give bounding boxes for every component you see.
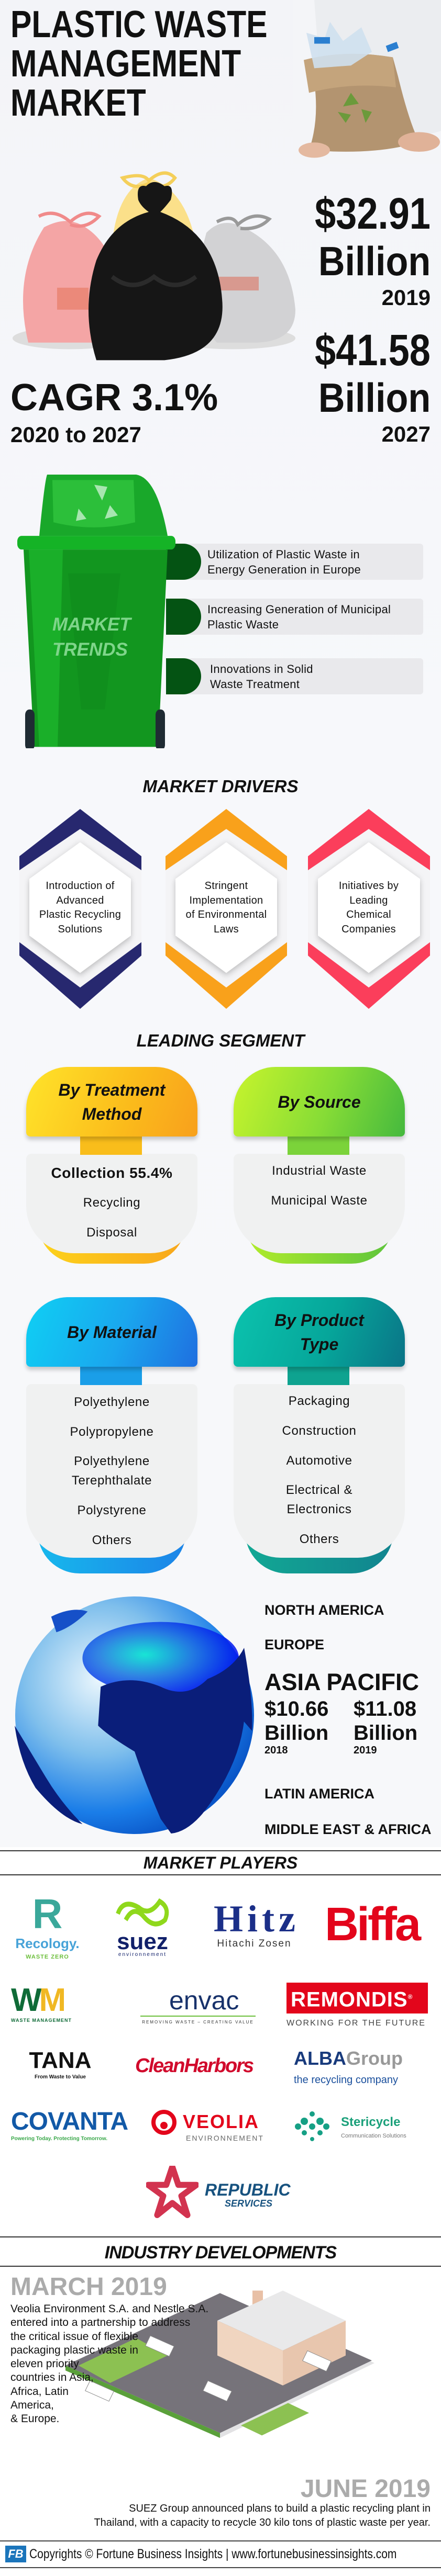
development: March 2019: eleven priority <box>10 2358 79 2370</box>
logo: suez: environnement <box>118 1952 167 1958</box>
regions list <box>264 1602 432 1837</box>
stat: Asia Pacific 2018: 2018 <box>264 1745 288 1756</box>
logo: Waste Management: WM <box>11 1982 63 2018</box>
illustration: isometric recycling plant <box>65 2291 374 2438</box>
logo: Hitz Hitachi Zosen: Hitz <box>214 1898 300 1940</box>
development: March 2019: countries in Asia, <box>10 2371 94 2383</box>
logo: ALBA Group: the recycling company <box>294 2074 398 2086</box>
logos grid <box>11 1891 428 2218</box>
development: March 2019: America, <box>10 2399 54 2411</box>
region: Middle East & Africa: MIDDLE EAST & AFRICA <box>264 1821 432 1837</box>
illustration: garbage bags <box>13 171 295 360</box>
driver text 1: Solutions <box>58 923 102 935</box>
driver text 1: Plastic Recycling <box>39 909 121 920</box>
stat: 2019 value: Billion <box>318 238 431 284</box>
logo: Stericycle <box>295 2111 406 2141</box>
development: March 2019: & Europe. <box>10 2413 59 2425</box>
trend bar 2 <box>166 599 423 635</box>
logo: Recology: WASTE ZERO <box>26 1954 69 1960</box>
logo: Biffa: Biffa <box>325 1898 419 1951</box>
stat: 2027 value: Billion <box>318 375 431 421</box>
card: By Material: Polyethylene <box>74 1454 150 1468</box>
card: By Source: Municipal Waste <box>271 1194 368 1208</box>
stat: 2027 value <box>315 325 431 446</box>
driver text 2: Implementation <box>190 895 263 906</box>
logo: envac: envac <box>169 1986 239 2015</box>
background top area <box>0 0 441 1847</box>
label: MARKET TRENDS: MARKET <box>52 614 131 635</box>
logo: Republic Services <box>146 2166 291 2218</box>
logo: ALBA Group: ALBAGroup <box>294 2048 403 2069</box>
card: By Product Type: Type <box>300 1334 338 1353</box>
development: June 2019: Thailand, with a capacity to recycle 30 kilo tons of plastic waste per year. <box>94 2517 431 2528</box>
card: By Treatment Method: Collection 55.4% <box>51 1165 173 1181</box>
card: By Material: Polyethylene <box>74 1395 150 1409</box>
card: By Product Type: Others <box>300 1532 339 1546</box>
card: By Treatment Method: Disposal <box>86 1225 137 1240</box>
driver text 2: of Environmental <box>186 909 267 920</box>
development: March 2019: packaging plastic waste in <box>10 2344 138 2356</box>
logo: TANA: From Waste to Value <box>35 2074 86 2080</box>
logo: ALBA Group <box>294 2048 403 2086</box>
logo: suez <box>116 1898 169 1958</box>
card: By Product Type: Automotive <box>286 1454 352 1468</box>
trend bar 2: Increasing Generation of Municipal <box>207 603 391 616</box>
development: March 2019: the critical issue of flexible <box>10 2331 138 2343</box>
title <box>10 4 268 124</box>
card: By Treatment Method: Recycling <box>83 1196 140 1210</box>
card: By Product Type: Construction <box>282 1424 356 1438</box>
market trends panel <box>17 475 423 748</box>
card: By Product Type: Packaging <box>289 1394 350 1408</box>
stat: 2019 value: 2019 <box>382 285 431 310</box>
card: By Treatment Method <box>24 1067 199 1264</box>
card: By Material: Polystyrene <box>78 1503 147 1517</box>
icon: green wheelie bin <box>17 475 175 748</box>
logo: Republic Services: SERVICES <box>225 2198 272 2209</box>
trend bar 3: Innovations in Solid <box>210 662 313 676</box>
hexagon: driver 1 <box>19 809 141 1009</box>
logo: Veolia: VEOLIA <box>183 2111 259 2132</box>
development: March 2019: Africa, Latin <box>10 2386 69 2398</box>
card: By Material: Others <box>92 1533 131 1547</box>
photo: hands holding recycling sack <box>299 2 441 158</box>
driver text 1: Advanced <box>56 895 104 906</box>
trend bar 3 <box>166 658 423 694</box>
logo: REMONDIS: WORKING FOR THE FUTURE <box>286 2019 426 2028</box>
logo: envac: REMOVING WASTE – CREATING VALUE <box>142 2020 254 2024</box>
card: By Source: Industrial Waste <box>272 1164 367 1178</box>
card: By Product Type: Electrical & <box>286 1483 352 1497</box>
globe <box>15 1596 254 1834</box>
stat: Asia Pacific 2018 <box>264 1697 328 1756</box>
driver text 3: Chemical <box>346 909 391 920</box>
heading: INDUSTRY DEVELOPMENTS: INDUSTRY DEVELOPMENTS <box>105 2243 336 2263</box>
stat: 2019 value: $32.91 <box>315 189 431 238</box>
logo: Covanta: COVANTA <box>11 2108 128 2135</box>
development: March 2019: entered into a partnership to address <box>10 2316 190 2328</box>
stat: Asia Pacific 2019: $11.08 <box>354 1697 416 1720</box>
driver text 2: Stringent <box>205 880 248 892</box>
footer text: Copyrights © Fortune Business Insights | www.fortunebusinessinsights.com <box>29 2547 396 2561</box>
card: By Product Type <box>231 1297 406 1573</box>
logo: REMONDIS <box>286 1983 428 2028</box>
driver text 1: Introduction of <box>46 880 115 892</box>
driver text 3: Companies <box>341 923 396 935</box>
stat: Asia Pacific 2019: Billion <box>354 1722 417 1745</box>
driver text 2: Laws <box>214 923 239 935</box>
trend bar 3: Waste Treatment <box>210 678 300 691</box>
card: By Treatment Method: By Treatment <box>59 1080 165 1099</box>
logo: suez: suez <box>117 1929 168 1954</box>
heading: LEADING SEGMENT: LEADING SEGMENT <box>137 1031 304 1050</box>
icon: FBI logo: FB <box>8 2547 24 2560</box>
logo: Stericycle: Communication Solutions <box>341 2133 406 2139</box>
logo: Recology: Recology. <box>15 1936 80 1951</box>
logo: REMONDIS: REMONDIS® <box>291 1988 413 2011</box>
logo: Covanta: Powering Today. Protecting Tomorrow. <box>11 2136 107 2142</box>
driver text 3: Initiatives by <box>339 880 399 892</box>
development: June 2019 <box>94 2475 431 2528</box>
footer <box>5 2546 396 2562</box>
card: By Material: Polypropylene <box>70 1425 153 1439</box>
card: By Product Type: By Product <box>274 1310 364 1329</box>
card: By Material: By Material <box>67 1323 157 1342</box>
region: North America: NORTH AMERICA <box>264 1602 384 1618</box>
stat: 2019 value <box>315 189 431 310</box>
hexagon: driver 2 <box>166 809 287 1009</box>
logo: Recology: R <box>32 1891 62 1937</box>
stat: Asia Pacific 2019 <box>354 1697 417 1756</box>
driver text 3 <box>339 880 399 935</box>
trend bar 1: Energy Generation in Europe <box>207 563 361 576</box>
stat: 2027 value: 2027 <box>382 422 431 446</box>
card: By Product Type: Electronics <box>287 1502 351 1516</box>
market drivers hexagons <box>19 809 430 1009</box>
region: Europe: EUROPE <box>264 1637 324 1652</box>
stat: CAGR <box>10 377 218 447</box>
heading: MARKET PLAYERS: MARKET PLAYERS <box>144 1853 297 1872</box>
card: By Material <box>24 1297 199 1573</box>
trend bar 1 <box>166 544 423 580</box>
title: MARKET <box>10 82 146 124</box>
icon: FBI logo <box>5 2546 26 2562</box>
development: June 2019: JUNE 2019 <box>301 2475 431 2503</box>
title: MANAGEMENT <box>10 43 241 85</box>
logo: Veolia <box>151 2110 264 2142</box>
logo: Stericycle: Stericycle <box>341 2115 400 2129</box>
development: March 2019 <box>10 2273 208 2425</box>
development: March 2019: MARCH 2019 <box>10 2273 167 2301</box>
logo: Hitz Hitachi Zosen: Hitachi Zosen <box>217 1938 292 1949</box>
driver text 2 <box>186 880 267 935</box>
card: By Source <box>231 1067 406 1264</box>
logo: envac <box>140 1986 256 2024</box>
card: By Treatment Method: Method <box>82 1104 141 1123</box>
logo: TANA: TANA <box>29 2048 91 2073</box>
title: PLASTIC WASTE <box>10 4 268 46</box>
logo: Recology <box>15 1891 80 1960</box>
region: Asia Pacific: ASIA PACIFIC <box>264 1669 419 1695</box>
label: MARKET TRENDS: TRENDS <box>52 639 128 660</box>
trend bar 1: Utilization of Plastic Waste in <box>207 548 360 561</box>
hexagon: driver 3 <box>308 809 430 1009</box>
stat: Asia Pacific 2019: 2019 <box>354 1745 377 1756</box>
driver text 3: Leading <box>349 895 388 906</box>
stat: 2027 value: $41.58 <box>315 325 431 375</box>
heading: MARKET DRIVERS: MARKET DRIVERS <box>142 777 299 796</box>
label: MARKET TRENDS <box>52 614 132 660</box>
logo: Clean Harbors: CleanHarbors <box>135 2055 253 2077</box>
trend bar 2: Plastic Waste <box>207 618 279 631</box>
stat: CAGR: 2020 to 2027 <box>10 422 141 447</box>
logo: Veolia: ENVIRONNEMENT <box>186 2134 264 2142</box>
card: By Material: Terephthalate <box>72 1473 152 1488</box>
card: By Source: By Source <box>278 1093 361 1111</box>
development: June 2019: SUEZ Group announced plans to build a plastic recycling plant in <box>129 2503 431 2514</box>
region: Latin America: LATIN AMERICA <box>264 1786 374 1802</box>
development: March 2019: Veolia Environment S.A. and Nestle S.A. <box>10 2303 208 2315</box>
stat: Asia Pacific 2018: $10.66 <box>264 1697 328 1720</box>
stat: Asia Pacific 2018: Billion <box>264 1722 328 1745</box>
logo: Waste Management: WASTE MANAGEMENT <box>11 2018 72 2023</box>
logo: Republic Services: REPUBLIC <box>205 2180 291 2199</box>
stat: CAGR: CAGR 3.1% <box>10 377 218 419</box>
driver text 1 <box>39 880 121 935</box>
